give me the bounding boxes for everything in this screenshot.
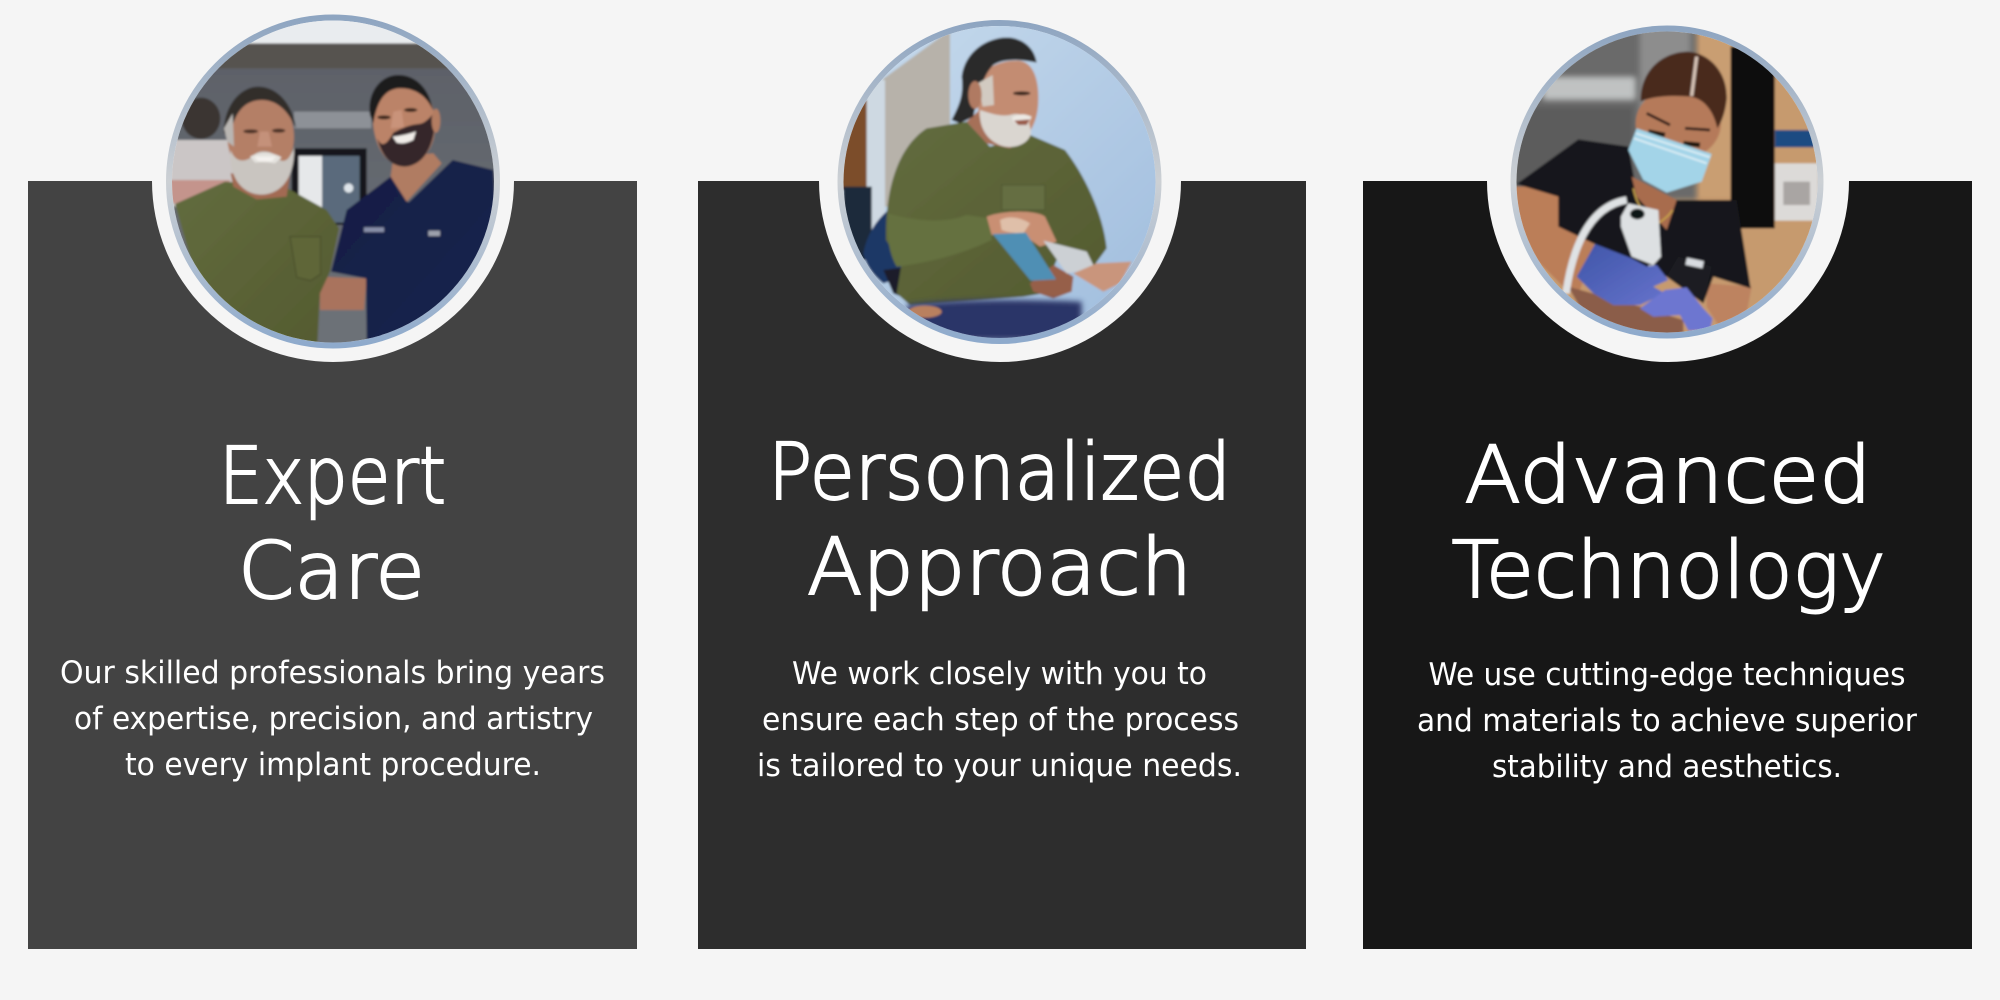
- black scrubs: [1517, 139, 1751, 303]
- panel: Expert Care: [28, 13, 637, 949]
- head: [1634, 94, 1722, 152]
- chair: [863, 210, 903, 283]
- body text: Advanced Technology: stability and aesthetics.: [1492, 749, 1842, 785]
- heading: Expert Care: [219, 432, 446, 617]
- sweater: [886, 122, 1107, 305]
- handpiece: [1633, 237, 1662, 270]
- brochures: [993, 233, 1056, 281]
- photo: smiling patient and dentist: [160, 13, 507, 353]
- surgical mask: [1628, 128, 1712, 193]
- patient: [1568, 287, 1683, 337]
- neck and chain: [1632, 177, 1677, 230]
- cable: [1566, 200, 1627, 293]
- heading: Personalized Approach: Personalized: [768, 428, 1231, 518]
- heading: Expert Care: Expert: [219, 432, 446, 522]
- panel: Advanced Technology: [1363, 17, 1972, 949]
- heading: Advanced Technology: Technology: [1452, 526, 1886, 616]
- body text: Advanced Technology: and materials to achieve superior: [1417, 703, 1917, 739]
- hands: [987, 212, 1057, 247]
- body text: Advanced Technology: [1417, 657, 1917, 785]
- card background with circular cut-out: [1363, 181, 1972, 949]
- panel: Personalized Approach: [698, 17, 1306, 949]
- dentist head: [373, 83, 435, 166]
- body text: Personalized Approach: ensure each step of the process: [762, 702, 1239, 738]
- body text: Advanced Technology: We use cutting-edge techniques: [1428, 657, 1906, 693]
- dentist arm: [320, 277, 367, 310]
- patient head: [231, 173, 290, 199]
- card background with circular cut-out: [28, 181, 637, 949]
- body text: Personalized Approach: [757, 656, 1242, 784]
- neck and head: [966, 110, 1012, 150]
- blurred foreground: [907, 300, 1082, 340]
- heading: Advanced Technology: [1452, 431, 1886, 616]
- navy scrubs: [331, 160, 497, 343]
- green shirt: [175, 182, 339, 347]
- heading: Personalized Approach: Approach: [807, 523, 1192, 613]
- body text: Personalized Approach: is tailored to your unique needs.: [757, 748, 1242, 784]
- body text: Expert Care: [60, 655, 605, 783]
- body text: Expert Care: Our skilled professionals bring years: [60, 655, 605, 691]
- arms: [1515, 187, 1595, 290]
- body text: Expert Care: of expertise, precision, and artistry: [74, 701, 593, 737]
- heading: Advanced Technology: Advanced: [1464, 431, 1872, 521]
- body text: Personalized Approach: We work closely with you to: [792, 656, 1207, 692]
- heading: Personalized Approach: [768, 428, 1231, 613]
- photo: patient reviewing documents: [830, 17, 1177, 350]
- heading: Expert Care: Care: [238, 527, 425, 617]
- card background with circular cut-out: [698, 181, 1306, 949]
- photo: clinician using dental instrument: [1510, 26, 1824, 338]
- gloves: [1577, 244, 1668, 305]
- body text: Expert Care: to every implant procedure.: [125, 747, 541, 783]
